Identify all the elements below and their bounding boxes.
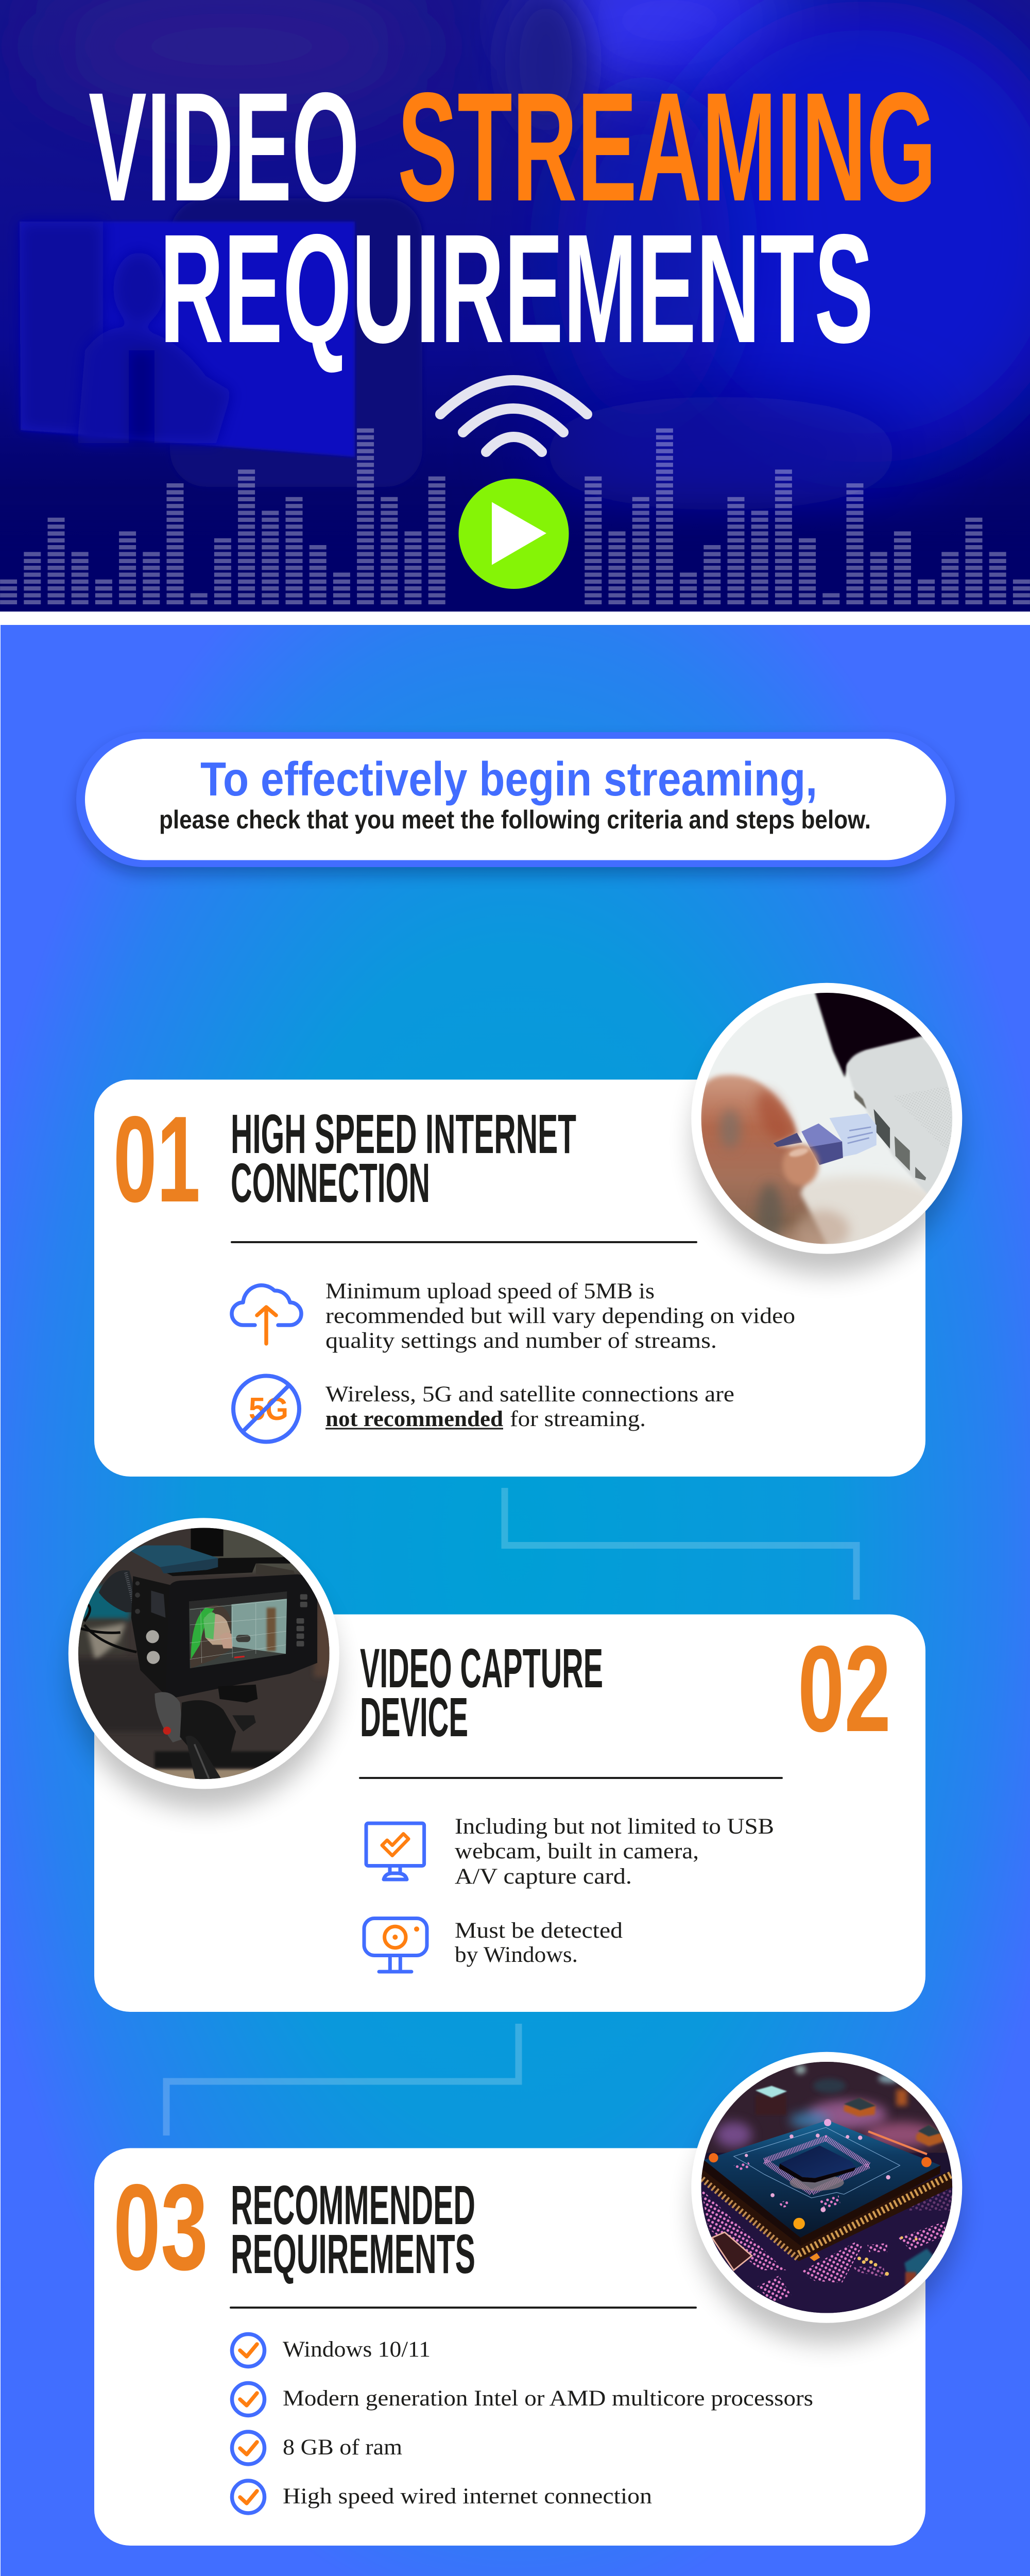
main blue panel (1, 625, 1030, 2576)
item: windows (232, 2334, 431, 2367)
icon: wifi waves (440, 380, 587, 452)
title (89, 92, 931, 373)
heading 03: REQUIREMENTS (231, 2223, 475, 2285)
text: wireless not recommended: for streaming. (510, 1407, 646, 1431)
intro callout pill (76, 732, 955, 875)
text: wireless not recommended (325, 1382, 734, 1431)
text: detected by windows: by Windows. (455, 1943, 578, 1967)
number 02: 02 (798, 1621, 891, 1757)
photo: circuit chip (685, 2048, 969, 2343)
icon: monitor with check (366, 1823, 424, 1879)
title: VIDEO (89, 60, 359, 233)
text: wireless not recommended: not recommended (325, 1407, 503, 1431)
heading 01: HIGH SPEED INTERNET (231, 1103, 576, 1165)
panel: 01 high speed internet (94, 1080, 925, 1477)
icon: webcam (364, 1919, 427, 1972)
text: capture types: A/V capture card. (455, 1865, 632, 1889)
icon: no 5G: 5G (249, 1392, 288, 1427)
item: wired internet: High speed wired internet connection (283, 2484, 652, 2509)
item: ram: 8 GB of ram (283, 2435, 402, 2460)
number 03: 03 (113, 2159, 208, 2296)
text: wireless not recommended: Wireless, 5G and satellite connections are (325, 1382, 734, 1406)
panel: 03 recommended requirements (94, 2148, 925, 2546)
intro subtext: please check that you meet the following criteria and steps below. (159, 805, 871, 834)
panel: 02 video capture device (94, 1615, 925, 2012)
connector: card 2 to card 3 (166, 2024, 519, 2136)
heading 03 (231, 2174, 475, 2285)
item: wired internet (232, 2481, 652, 2513)
item: windows: Windows 10/11 (283, 2337, 431, 2362)
heading 01 (231, 1103, 576, 1214)
icon: cloud upload (232, 1285, 301, 1344)
text: upload speed: quality settings and number of streams. (325, 1329, 717, 1353)
heading 02: DEVICE (360, 1686, 468, 1748)
photo: network cable (685, 979, 969, 1274)
photo: video camera (64, 1515, 348, 1809)
text: capture types: webcam, built in camera, (455, 1839, 699, 1863)
header background photo (16, 0, 1030, 585)
text: detected by windows (455, 1919, 623, 1967)
heading 02: VIDEO CAPTURE (360, 1637, 603, 1699)
header banner (0, 0, 1030, 654)
text: detected by windows: Must be detected (455, 1919, 623, 1943)
heading 01: CONNECTION (231, 1151, 430, 1214)
item: processors (232, 2383, 813, 2415)
number 01: 01 (113, 1091, 200, 1228)
text: capture types (455, 1815, 774, 1889)
text: upload speed (325, 1279, 795, 1353)
heading 02 (360, 1637, 603, 1748)
text: upload speed: Minimum upload speed of 5MB is (325, 1279, 655, 1303)
item: processors: Modern generation Intel or AMD multicore processors (283, 2386, 813, 2411)
text: capture types: Including but not limited to USB (455, 1815, 774, 1839)
icon: no 5G (233, 1376, 299, 1442)
equalizer bars (9, 428, 1021, 604)
icon: play button (458, 479, 569, 589)
connector: card 1 to card 2 (505, 1488, 856, 1600)
intro heading: To effectively begin streaming, (200, 752, 817, 806)
heading 03: RECOMMENDED (231, 2174, 475, 2236)
text: upload speed: recommended but will vary depending on video (325, 1304, 795, 1328)
item: ram (232, 2432, 402, 2464)
